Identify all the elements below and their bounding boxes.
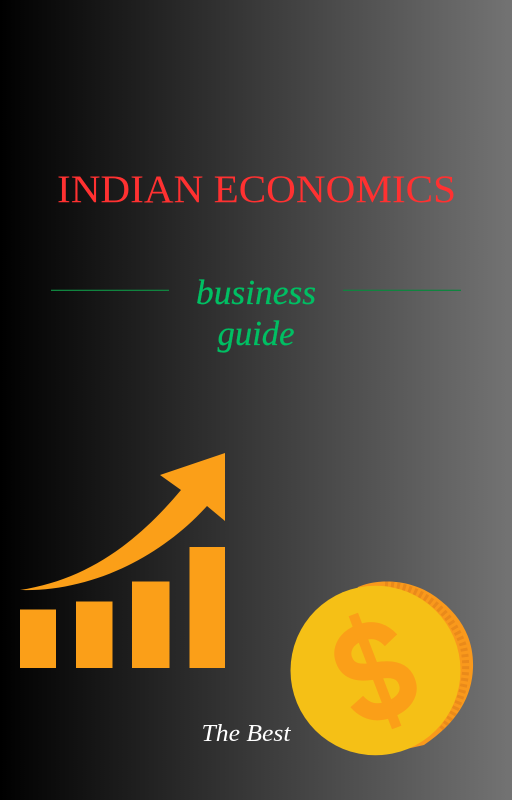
- bar 4: [190, 547, 225, 668]
- subtitle right rule: [343, 290, 461, 291]
- coin face: [290, 586, 460, 755]
- coin edge: [340, 581, 473, 755]
- growth arrow: [20, 453, 225, 590]
- dollar sign: [327, 605, 421, 738]
- tagline: The Best: The Best: [202, 721, 292, 747]
- title: INDIAN ECONOMICS: [57, 167, 456, 211]
- bar 2: [76, 602, 112, 668]
- subtitle: business guide: guide: [218, 314, 294, 353]
- bar 3: [132, 582, 170, 668]
- icon: gold dollar coin: [290, 581, 473, 755]
- icon: rising bar chart with arrow: [20, 453, 225, 668]
- subtitle left rule: [51, 290, 169, 291]
- subtitle: business guide: [196, 273, 316, 353]
- bar 1: [20, 610, 56, 668]
- subtitle: business guide: business: [196, 273, 316, 312]
- coin ridges: [385, 584, 466, 730]
